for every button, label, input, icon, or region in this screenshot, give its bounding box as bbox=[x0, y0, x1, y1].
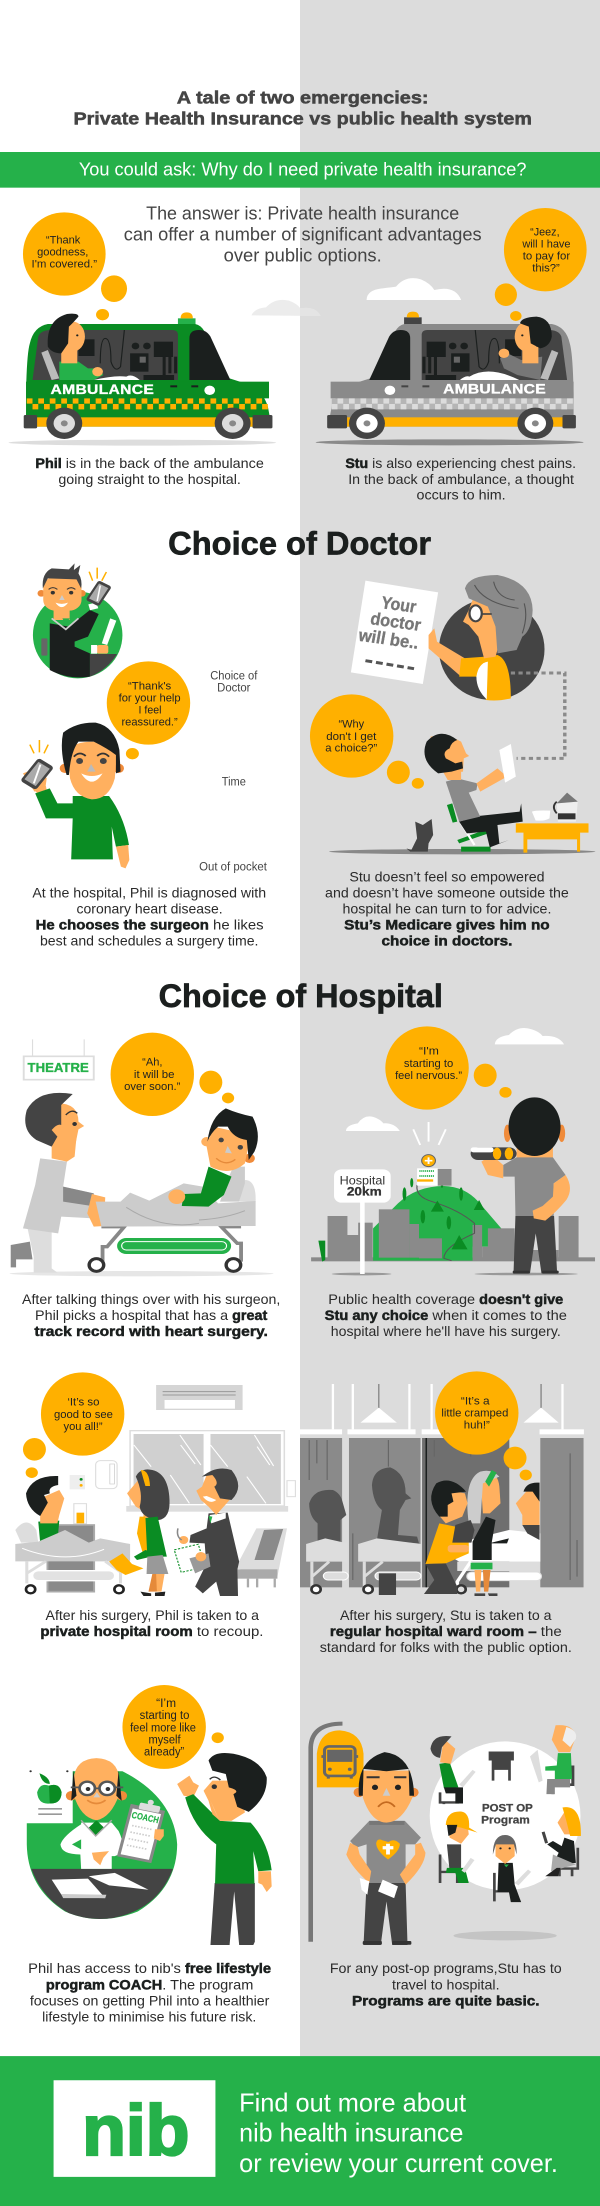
caption: Phil doctor: coronary heart disease. bbox=[77, 901, 223, 917]
answer text: can offer a number of significant advantages bbox=[124, 225, 482, 245]
call to action: Find out more about bbox=[239, 2088, 466, 2117]
caption: Phil room: private hospital room to recoup. bbox=[40, 1624, 263, 1640]
speech bubble: over soon: it will be bbox=[134, 1068, 175, 1081]
comparison labels: Time bbox=[222, 774, 246, 788]
speech bubble: good to see bbox=[23, 1372, 124, 1478]
caption: Stu hospital: hospital where he'll have his surgery. bbox=[331, 1324, 561, 1340]
caption: Stu room: regular hospital ward room – the bbox=[330, 1624, 562, 1640]
speech bubble: Stu: to pay for bbox=[523, 249, 570, 262]
caption: Phil doctor: best and schedules a surgery time. bbox=[40, 933, 258, 949]
speech bubble: thanks: “Thank's bbox=[128, 679, 171, 692]
speech bubble: no choice: don't I get bbox=[326, 730, 377, 743]
caption: Phil doctor: At the hospital, Phil is diagnosed with bbox=[32, 885, 266, 901]
caption: Phil coach: program COACH. The program bbox=[46, 1977, 253, 1993]
caption: Stu room bbox=[320, 1608, 572, 1656]
cloud: centre bbox=[251, 300, 321, 316]
speech bubble: Stu bbox=[495, 208, 587, 321]
speech bubble: nervous bbox=[385, 1026, 512, 1110]
speech bubble: over soon: “Ah, bbox=[142, 1055, 162, 1068]
caption: Stu room: After his surgery, Stu is taken to a bbox=[340, 1608, 552, 1624]
heading: Choice of Doctor bbox=[168, 526, 431, 562]
speech bubble: more like myself: feel more like bbox=[130, 1721, 196, 1734]
bus stop bbox=[311, 1724, 364, 1942]
caption: Stu ambulance: Stu is also experiencing chest pains. bbox=[345, 456, 576, 472]
caption: Stu doctor: Stu doesn’t feel so empowered bbox=[349, 869, 545, 885]
speech bubble: thanks: for your help bbox=[119, 691, 181, 704]
caption: Stu ambulance: In the back of ambulance, a thought bbox=[348, 472, 575, 488]
speech bubble: nervous: starting to bbox=[404, 1057, 453, 1070]
logo: nib: nib bbox=[82, 2092, 189, 2171]
answer text bbox=[124, 204, 482, 266]
sign: theatre bbox=[24, 1039, 94, 1080]
caption: Stu room: standard for folks with the public option. bbox=[320, 1640, 572, 1656]
caption: Stu ambulance: occurs to him. bbox=[417, 488, 506, 503]
speech bubble: more like myself bbox=[122, 1685, 224, 1769]
illustration: receptionist bbox=[429, 575, 545, 701]
speech bubble: good to see: ‘It’s so bbox=[67, 1395, 100, 1408]
caption: Stu ambulance bbox=[345, 456, 576, 503]
caption: Phil coach: Phil has access to nib's free lifestyle bbox=[28, 1961, 271, 1977]
comparison labels: Doctor bbox=[217, 680, 251, 694]
illustration: coach: COACH bbox=[130, 1810, 160, 1826]
caption: Phil coach: lifestyle to minimise his future risk. bbox=[42, 2009, 256, 2025]
speech bubble: more like myself: starting to bbox=[140, 1709, 189, 1722]
illustration: post op circle bbox=[430, 1725, 581, 1940]
speech bubble: cramped bbox=[435, 1371, 532, 1480]
speech bubble: no choice: “Why bbox=[338, 717, 365, 730]
speech bubble: Stu: will I have bbox=[521, 237, 571, 250]
ambulance: Stu bbox=[316, 312, 584, 445]
ambulance: Stu: AMBULANCE bbox=[443, 382, 546, 397]
section: choice of doctor bbox=[20, 526, 595, 949]
speech bubble: Stu: “Jeez, bbox=[530, 225, 560, 238]
caption: Stu hospital: Public health coverage doesn't give bbox=[328, 1292, 563, 1308]
logo: nib bbox=[54, 2080, 215, 2177]
illustration: post op circle: Program bbox=[481, 1813, 530, 1826]
question banner: You could ask: Why do I need private health insurance? bbox=[79, 160, 527, 180]
caption: Stu doctor: choice in doctors. bbox=[382, 933, 512, 949]
footer band bbox=[0, 2056, 600, 2206]
caption: Phil room bbox=[40, 1608, 263, 1640]
caption: Phil hospital: track record with heart surgery. bbox=[34, 1324, 268, 1340]
illustration: paper notice: doctor bbox=[369, 608, 423, 635]
caption: Stu doctor: and doesn’t have someone outside the bbox=[325, 885, 569, 901]
caption: Phil coach: focuses on getting Phil into a healthier bbox=[30, 1993, 269, 2009]
illustration: Phil waving bbox=[177, 1753, 272, 1945]
speech bubble: nervous: feel nervous.” bbox=[395, 1069, 462, 1082]
speech bubble: Phil: goodness, bbox=[37, 245, 88, 258]
title bbox=[73, 88, 532, 129]
illustration: Stu at bus stop bbox=[346, 1752, 426, 1945]
illustration: Phil with phone bbox=[20, 723, 129, 868]
ambulance: Phil: AMBULANCE bbox=[51, 383, 154, 398]
comparison labels: Choice of bbox=[210, 668, 258, 682]
section: choice of hospital bbox=[10, 978, 595, 1340]
speech bubble: thanks: reassured.” bbox=[121, 715, 178, 728]
speech bubble: cramped: “It’s a bbox=[461, 1394, 490, 1407]
speech bubble: cramped: huh!” bbox=[464, 1418, 490, 1431]
illustration: private room bbox=[15, 1385, 295, 1596]
answer text: over public options. bbox=[224, 246, 382, 266]
speech bubble: more like myself: already” bbox=[144, 1745, 184, 1758]
illustration: Stu with binoculars bbox=[471, 1097, 578, 1275]
illustration: hospital on hill: 20km bbox=[347, 1185, 382, 1198]
caption: Phil room: After his surgery, Phil is taken to a bbox=[46, 1608, 260, 1624]
speech bubble: Phil: “Thank bbox=[46, 233, 81, 246]
caption: Phil ambulance bbox=[35, 456, 264, 488]
speech bubble: thanks: I feel bbox=[139, 703, 161, 716]
illustration: hospital on hill: Hospital bbox=[340, 1173, 385, 1187]
comparison labels: Out of pocket bbox=[199, 860, 267, 873]
illustration: surgeon pushing Phil bbox=[10, 1093, 274, 1276]
caption: Phil doctor: He chooses the surgeon he likes bbox=[36, 917, 264, 933]
speech bubble: thanks bbox=[107, 661, 190, 759]
speech bubble: good to see: good to see bbox=[54, 1408, 113, 1421]
illustration: hospital on hill bbox=[311, 1122, 595, 1275]
speech bubble: Phil: I'm covered.” bbox=[32, 257, 97, 270]
caption: Phil hospital: Phil picks a hospital that has a great bbox=[35, 1308, 267, 1324]
caption: Stu programs: Programs are quite basic. bbox=[352, 1993, 540, 2009]
comparison labels bbox=[199, 668, 267, 873]
illustration: surgeon on phone bbox=[33, 563, 122, 678]
call to action bbox=[239, 2088, 558, 2177]
caption: Phil coach bbox=[28, 1961, 271, 2025]
illustration: coach bbox=[27, 1758, 177, 1919]
caption: Stu doctor bbox=[325, 869, 569, 949]
caption: Phil ambulance: going straight to the hospital. bbox=[58, 472, 241, 488]
caption: Phil hospital: After talking things over with his surgeon, bbox=[22, 1292, 280, 1308]
caption: Phil doctor bbox=[32, 885, 266, 949]
call to action: or review your current cover. bbox=[239, 2149, 558, 2177]
speech bubble: Phil bbox=[23, 212, 127, 320]
dotted connector bbox=[511, 673, 565, 758]
illustration: paper notice: Your bbox=[380, 592, 418, 616]
title: Private Health Insurance vs public health system bbox=[73, 109, 532, 129]
speech bubble: no choice: a choice?” bbox=[325, 741, 377, 754]
caption: Stu programs: For any post-op programs,Stu has to bbox=[330, 1961, 562, 1977]
cloud: right bbox=[367, 278, 461, 300]
illustration: Stu at home bbox=[329, 734, 595, 854]
caption: Phil hospital bbox=[22, 1292, 280, 1340]
section: recovery room bbox=[15, 1371, 584, 1656]
illustration: paper notice: will be.. bbox=[356, 625, 420, 653]
speech bubble: over soon bbox=[111, 1033, 234, 1116]
caption: Stu hospital: Stu any choice when it comes to the bbox=[325, 1308, 567, 1324]
heading: Choice of Hospital bbox=[159, 978, 443, 1014]
sign: theatre: THEATRE bbox=[28, 1060, 89, 1075]
caption: Stu programs: travel to hospital. bbox=[392, 1977, 500, 1993]
caption: Stu hospital bbox=[325, 1292, 567, 1340]
speech bubble: cramped: little cramped bbox=[441, 1406, 508, 1419]
title: A tale of two emergencies: bbox=[177, 88, 429, 108]
speech bubble: nervous: “I'm bbox=[419, 1044, 439, 1057]
caption: Stu programs bbox=[330, 1961, 562, 2009]
illustration: shared ward bbox=[300, 1384, 584, 1596]
section: post-op programs bbox=[0, 1685, 600, 2206]
clouds bbox=[346, 1028, 564, 1131]
speech bubble: Stu: this?” bbox=[532, 261, 560, 274]
question banner bbox=[0, 152, 600, 188]
illustration: post op circle: POST OP bbox=[482, 1801, 533, 1814]
speech bubble: more like myself: “I’m bbox=[156, 1697, 176, 1710]
caption: Stu doctor: Stu’s Medicare gives him no bbox=[344, 917, 550, 933]
caption: Stu doctor: hospital he can turn to for advice. bbox=[342, 901, 551, 917]
caption: Phil ambulance: Phil is in the back of the ambulance bbox=[35, 456, 264, 472]
speech bubble: good to see: you all!” bbox=[64, 1420, 103, 1433]
speech bubble: no choice bbox=[310, 694, 424, 789]
illustration: paper notice bbox=[351, 581, 438, 684]
section: intro and ambulance bbox=[0, 88, 600, 503]
speech bubble: over soon: over soon.” bbox=[124, 1080, 180, 1093]
answer text: The answer is: Private health insurance bbox=[146, 204, 459, 224]
ambulance: Phil bbox=[8, 312, 276, 446]
speech bubble: more like myself: myself bbox=[148, 1733, 181, 1746]
call to action: nib health insurance bbox=[239, 2118, 463, 2147]
